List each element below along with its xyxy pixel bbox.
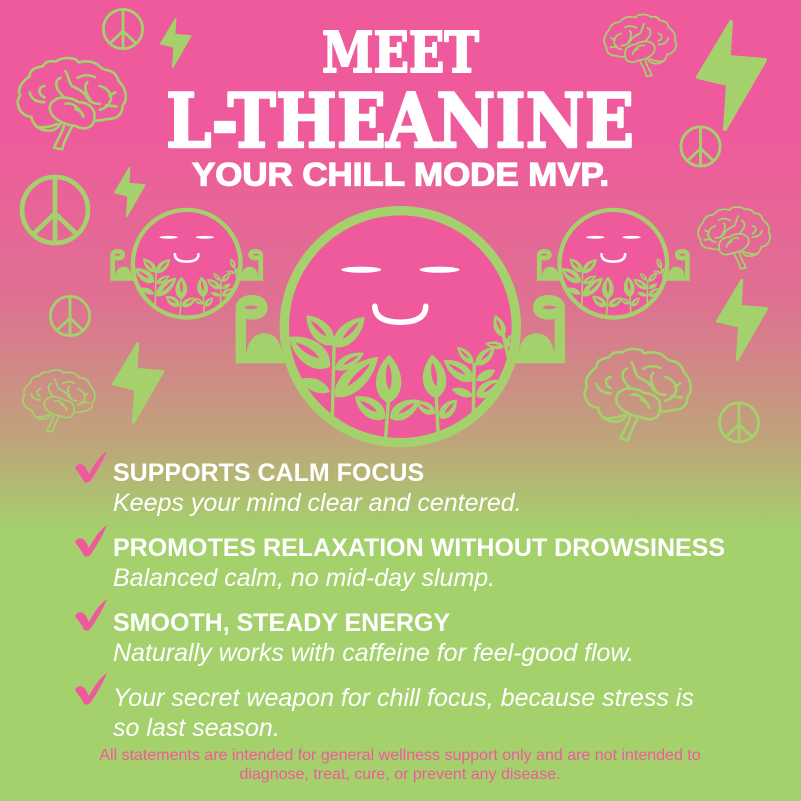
icon: bolt top right (698, 22, 765, 129)
icon: brain lower left (23, 370, 95, 432)
icon: bolt top left (161, 19, 191, 67)
icon: brain top right (604, 15, 676, 76)
mascot: small left smiling circle (110, 210, 263, 318)
icon: bolt right (717, 280, 767, 360)
closing statement: so last season. (113, 714, 280, 742)
icon: bolt left (115, 168, 145, 216)
mascot: small right smiling circle (537, 210, 690, 318)
icon: brain top left (18, 58, 126, 149)
icon: brain right (698, 207, 770, 269)
description: Balanced calm, no mid-day slump. (113, 564, 495, 592)
icon: check (75, 673, 107, 705)
description: Keeps your mind clear and centered. (113, 489, 522, 517)
icon: peace top left (103, 9, 143, 49)
benefit 3 (75, 599, 634, 667)
heading: SMOOTH, STEADY ENERGY (113, 609, 450, 637)
icon: check (75, 451, 107, 483)
benefit 1 (75, 451, 522, 517)
benefit 2 (75, 525, 725, 592)
icon: peace lower right (719, 403, 759, 442)
icon: peace top right (681, 127, 720, 166)
icon: check (75, 599, 107, 631)
disclaimer: diagnose, treat, cure, or prevent any disease. (239, 766, 561, 783)
icon: check (75, 525, 107, 557)
icon: bolt lower left (113, 343, 163, 423)
description: Naturally works with caffeine for feel-good flow. (113, 639, 634, 667)
title line: l-theanine: L-THEANINE (166, 77, 634, 165)
icon: peace left small (50, 296, 90, 336)
benefit 4 (75, 673, 694, 742)
icon: brain lower right (585, 349, 691, 440)
title line: meet: MEET (322, 20, 479, 86)
title (166, 20, 634, 192)
heading: SUPPORTS CALM FOCUS (113, 459, 424, 487)
mascot: large centre smiling circle (236, 211, 565, 443)
icon: peace left large (22, 177, 88, 243)
subtitle: YOUR CHILL MODE MVP. (192, 156, 609, 192)
heading: PROMOTES RELAXATION WITHOUT DROWSINESS (113, 534, 725, 562)
disclaimer: All statements are intended for general wellness support only and are not intended to (99, 747, 701, 764)
closing statement: Your secret weapon for chill focus, because stress is (113, 684, 694, 712)
